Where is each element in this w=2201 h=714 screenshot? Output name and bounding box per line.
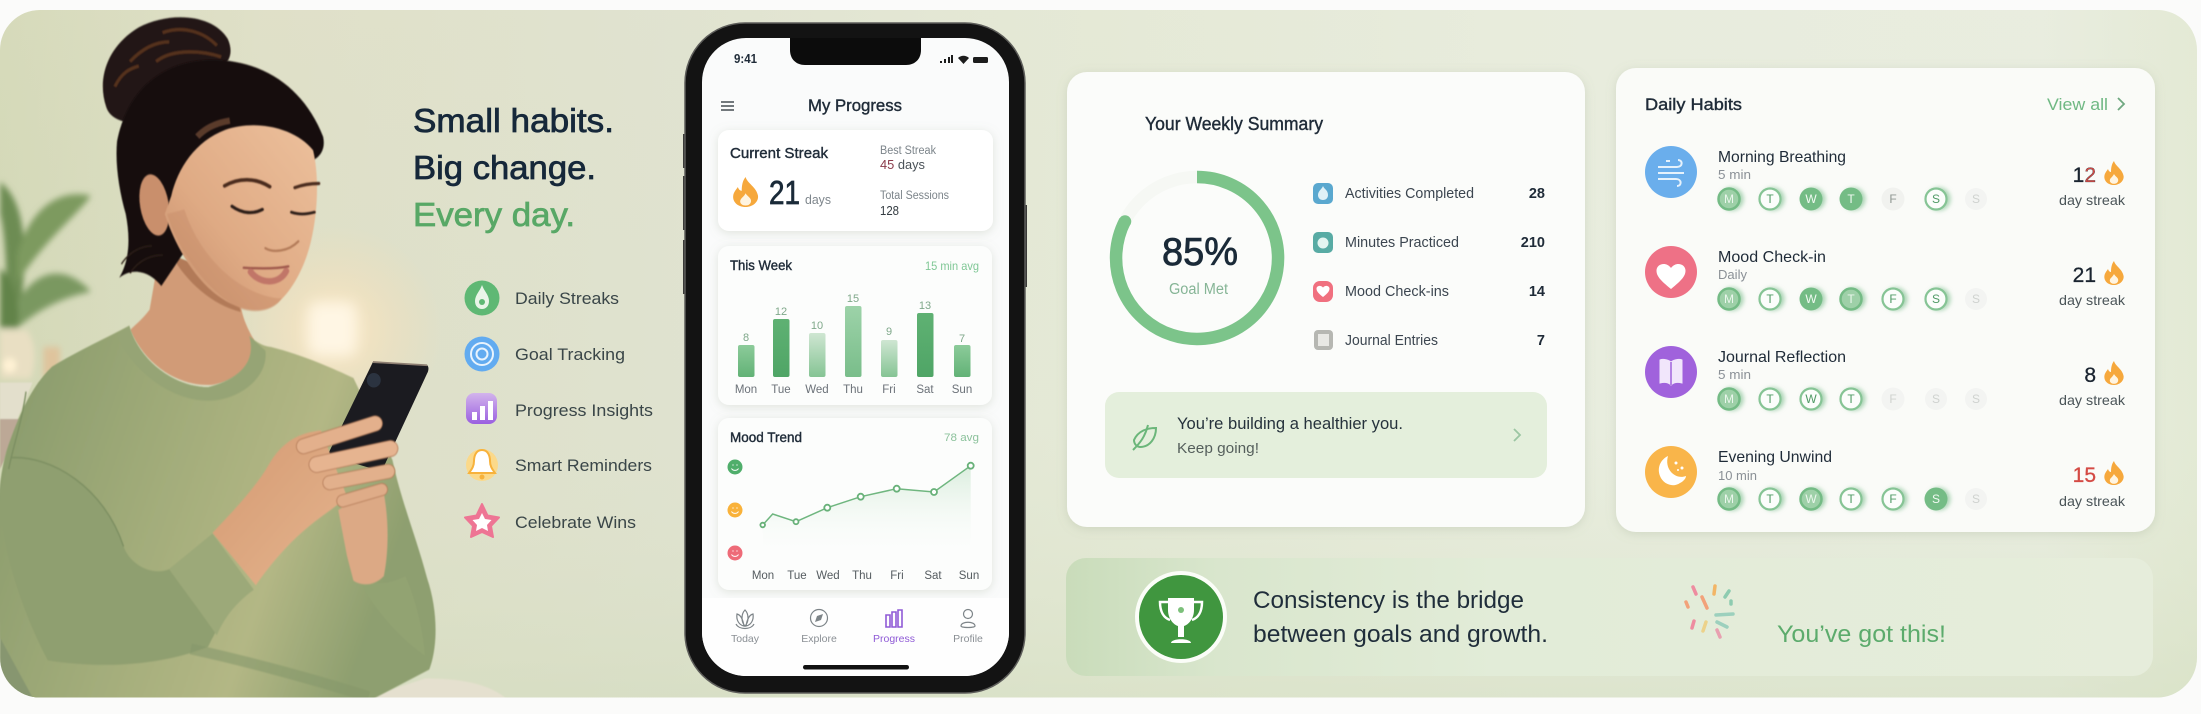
mood trend chart: Tue xyxy=(787,570,807,582)
day markers: T xyxy=(1766,392,1774,406)
habit: evening unwind: 10 min xyxy=(1718,468,1757,483)
phone frame xyxy=(683,23,1027,693)
face xyxy=(165,121,317,311)
feature: progress insights: Progress Insights xyxy=(515,401,653,420)
day markers xyxy=(1718,288,1987,310)
neck xyxy=(130,255,254,385)
stat: activities completed: Activities Completed xyxy=(1345,186,1474,202)
encouragement: You’ve got this! xyxy=(1777,621,1946,648)
arrow xyxy=(1514,429,1520,441)
streak: day streak xyxy=(2059,493,2126,509)
nav: today: Today xyxy=(731,633,760,645)
feature: progress insights xyxy=(466,393,653,424)
panel: weekly summary xyxy=(1067,72,1585,527)
habit: journal reflection xyxy=(1645,346,2126,410)
day markers: W xyxy=(1805,492,1817,506)
stat: mood check-ins: Mood Check-ins xyxy=(1345,284,1449,300)
ear xyxy=(138,173,169,237)
nav: explore: Explore xyxy=(801,633,837,645)
stat: minutes practiced: 210 xyxy=(1521,235,1545,251)
current streak card: days xyxy=(805,192,831,207)
status bar: 9:41 xyxy=(734,52,757,66)
houseplant xyxy=(0,182,91,379)
photo: woman using a phone xyxy=(0,17,510,701)
day markers: T xyxy=(1766,292,1774,306)
mood trend chart: Thu xyxy=(852,570,872,582)
this week bar chart: Mon xyxy=(735,384,757,396)
mood faces xyxy=(728,460,742,560)
app header: My Progress xyxy=(808,96,902,115)
this week bar chart xyxy=(718,246,992,405)
streak: day streak xyxy=(2059,392,2126,408)
callout: Keep going! xyxy=(1177,440,1259,457)
callout xyxy=(1105,392,1547,478)
sofa xyxy=(0,383,510,701)
icon: leaf xyxy=(1133,425,1156,450)
current streak card xyxy=(718,130,993,231)
this week bar chart: 12 xyxy=(775,306,787,318)
day markers: F xyxy=(1889,292,1897,306)
feature: smart reminders: Smart Reminders xyxy=(515,456,652,475)
stat: mood check-ins: 14 xyxy=(1529,284,1545,300)
day markers xyxy=(1718,488,1987,510)
nav: explore xyxy=(801,610,837,645)
bun xyxy=(103,17,231,123)
panel: daily habits xyxy=(1616,68,2155,532)
this week bar chart: Sun xyxy=(952,384,972,396)
headline: Every day. xyxy=(413,196,575,233)
day markers: M xyxy=(1724,392,1734,406)
feature: goal tracking: Goal Tracking xyxy=(515,345,625,364)
day markers: W xyxy=(1805,292,1817,306)
current streak card: 128 xyxy=(880,203,899,218)
this week bar chart: 7 xyxy=(959,333,965,345)
streak: 12 xyxy=(2073,164,2096,187)
day markers: S xyxy=(1932,392,1940,406)
day markers: S xyxy=(1972,292,1980,306)
this week bar chart: Sat xyxy=(916,384,934,396)
habit: morning breathing xyxy=(1645,146,2126,210)
current streak card: Best Streak xyxy=(880,145,936,157)
mood trend chart: Sun xyxy=(959,570,979,582)
nav: progress: Progress xyxy=(873,633,915,645)
feature: celebrate wins xyxy=(465,504,636,537)
trend line xyxy=(760,463,974,560)
day markers: M xyxy=(1724,192,1734,206)
day markers: S xyxy=(1932,492,1940,506)
day markers xyxy=(1718,388,1987,410)
streak xyxy=(2059,461,2126,509)
this week bar chart: Tue xyxy=(771,384,791,396)
hands xyxy=(212,424,390,585)
habit: morning breathing: 5 min xyxy=(1718,167,1751,182)
habit: mood check-in xyxy=(1645,246,2126,310)
day markers: T xyxy=(1847,292,1855,306)
heading: Your Weekly Summary xyxy=(1145,114,1323,134)
feature: goal tracking xyxy=(464,336,625,372)
this week bar chart: 15 min avg xyxy=(925,259,979,273)
habit: evening unwind: Evening Unwind xyxy=(1718,449,1832,466)
mood trend chart: Sat xyxy=(924,570,942,582)
callout: You’re building a healthier you. xyxy=(1177,415,1403,433)
this week bar chart: Thu xyxy=(843,384,863,396)
headline xyxy=(413,102,614,233)
feature: daily streaks xyxy=(464,280,619,316)
streak xyxy=(2059,261,2126,308)
banner: consistency quote xyxy=(1066,558,2153,676)
view all link: View all xyxy=(2047,95,2108,114)
day markers: T xyxy=(1766,192,1774,206)
day markers: F xyxy=(1889,492,1897,506)
day markers: T xyxy=(1847,492,1855,506)
progress ring xyxy=(1116,177,1278,339)
headline: Small habits. xyxy=(413,102,614,139)
lamp glow xyxy=(264,264,402,388)
habit: journal reflection: 5 min xyxy=(1718,367,1751,382)
icon: trophy xyxy=(1135,571,1227,663)
quote text: Consistency is the bridge xyxy=(1253,587,1524,614)
mood trend chart: Wed xyxy=(816,570,840,582)
sweater xyxy=(0,326,436,701)
stat: activities completed xyxy=(1313,183,1545,204)
hair xyxy=(117,60,324,286)
mood trend chart: Fri xyxy=(890,570,904,582)
current streak card: 21 xyxy=(769,174,800,211)
day markers: W xyxy=(1805,192,1817,206)
day markers: F xyxy=(1889,392,1897,406)
this week bar chart: 9 xyxy=(886,326,892,338)
day markers: S xyxy=(1972,392,1980,406)
progress ring: Goal Met xyxy=(1169,281,1229,298)
day markers: W xyxy=(1805,392,1817,406)
stat: mood check-ins xyxy=(1313,281,1545,302)
mood trend chart xyxy=(718,418,992,590)
day markers: S xyxy=(1932,292,1940,306)
bottom navigation xyxy=(702,598,1009,676)
mood trend chart: 78 avg xyxy=(944,432,979,444)
stat: minutes practiced: Minutes Practiced xyxy=(1345,235,1459,251)
mood trend chart: Mon xyxy=(752,570,774,582)
nav: profile xyxy=(953,610,983,645)
day markers: S xyxy=(1932,192,1940,206)
current streak card: Current Streak xyxy=(730,145,828,162)
day markers: T xyxy=(1847,192,1855,206)
day markers xyxy=(1718,188,1987,210)
feature: daily streaks: Daily Streaks xyxy=(515,289,619,308)
nav: today xyxy=(731,610,760,645)
feature: smart reminders xyxy=(466,449,652,481)
stat: minutes practiced xyxy=(1313,232,1545,253)
phone held in hand xyxy=(327,362,428,471)
nav: profile: Profile xyxy=(953,633,983,645)
habit: journal reflection: Journal Reflection xyxy=(1718,349,1846,366)
this week bar chart: 13 xyxy=(919,300,931,312)
this week bar chart: 15 xyxy=(847,293,859,305)
habit: morning breathing: Morning Breathing xyxy=(1718,149,1846,166)
day markers: T xyxy=(1766,492,1774,506)
feature: celebrate wins: Celebrate Wins xyxy=(515,513,636,532)
streak: day streak xyxy=(2059,192,2126,208)
mood trend chart: Mood Trend xyxy=(730,429,802,445)
facial features xyxy=(225,180,319,281)
habit: evening unwind xyxy=(1645,446,2126,510)
day markers: S xyxy=(1972,492,1980,506)
current streak card: Total Sessions xyxy=(880,190,949,202)
feature list xyxy=(464,280,653,537)
stat: journal entries xyxy=(1314,330,1545,350)
this week bar chart: Fri xyxy=(882,384,896,396)
day markers: F xyxy=(1889,192,1897,206)
streak: 8 xyxy=(2084,364,2096,387)
this week bar chart: Wed xyxy=(805,384,829,396)
nav: progress xyxy=(873,610,915,645)
stat: journal entries: Journal Entries xyxy=(1345,333,1438,349)
smartphone xyxy=(683,23,1027,693)
quote text xyxy=(1253,587,1548,648)
app header xyxy=(721,96,902,115)
habit: mood check-in: Mood Check-in xyxy=(1718,249,1826,266)
streak: 15 xyxy=(2073,464,2096,487)
day markers: M xyxy=(1724,492,1734,506)
day markers: T xyxy=(1847,392,1855,406)
heading: Daily Habits xyxy=(1645,95,1742,114)
quote text: between goals and growth. xyxy=(1253,621,1548,648)
streak xyxy=(2059,361,2126,408)
stats list xyxy=(1313,183,1545,350)
this week bar chart: 8 xyxy=(743,332,749,344)
streak: 21 xyxy=(2073,264,2096,287)
stat: journal entries: 7 xyxy=(1537,333,1545,349)
progress ring: 85% xyxy=(1162,231,1238,274)
day markers: M xyxy=(1724,292,1734,306)
current streak card: 45 days xyxy=(880,157,925,172)
day markers: S xyxy=(1972,192,1980,206)
habit: mood check-in: Daily xyxy=(1718,267,1747,282)
headline: Big change. xyxy=(413,149,596,186)
this week bar chart: 10 xyxy=(811,320,823,332)
icon: confetti burst xyxy=(1686,586,1733,637)
this week bar chart: This Week xyxy=(730,257,793,273)
streak: day streak xyxy=(2059,292,2126,308)
stat: activities completed: 28 xyxy=(1529,186,1545,202)
status bar xyxy=(734,52,988,66)
streak xyxy=(2059,161,2126,208)
icon: flame xyxy=(733,177,758,207)
